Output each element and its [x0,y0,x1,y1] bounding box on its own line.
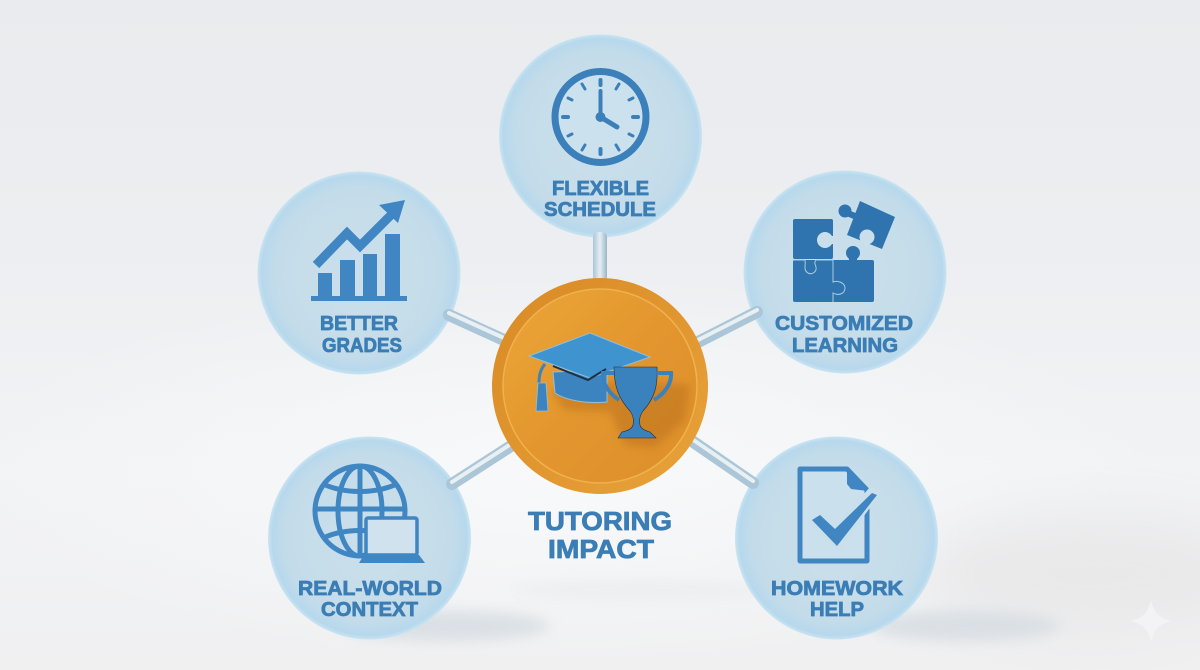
icon: puzzle pieces [793,201,895,302]
panel: flexible schedule [499,34,702,238]
label: BETTER [320,313,399,335]
label: SCHEDULE [544,199,656,221]
panel: better grades [258,172,460,374]
bubble [499,34,702,238]
label [298,578,442,621]
panel: central coin [492,278,708,494]
label: HELP [810,599,864,621]
panel: customized learning [744,170,946,374]
connector: lower left [452,442,514,484]
connector: lower right [692,439,753,483]
label: HOMEWORK [771,578,904,600]
label: GRADES [322,335,402,357]
bubble [735,436,938,640]
bubble [268,436,471,640]
background glow [0,275,1160,665]
floor shadows [340,580,1060,641]
icon: globe and laptop [315,466,425,563]
background shade: lower right [920,515,1200,635]
icon: graduation cap [529,333,650,411]
label: CONTEXT [321,599,418,621]
label: REAL-WORLD [298,578,442,600]
icon: rising bar chart [311,200,407,301]
connectors [449,232,757,484]
panel: homework help [735,436,938,640]
title: TUTORING [528,506,672,536]
label [544,178,656,221]
panel: real-world context [268,436,471,640]
icon: document with check mark [800,469,882,561]
title [528,506,672,564]
label: CUSTOMIZED [775,313,913,335]
title: IMPACT [548,534,654,564]
label [320,313,402,357]
coin face [503,289,697,483]
coin [492,278,708,494]
connector: top [593,232,607,282]
icon: sparkle watermark [1130,600,1172,642]
icon: trophy [603,367,671,438]
label: FLEXIBLE [552,178,649,200]
icon shadow [550,380,690,448]
label [771,578,904,621]
bubble [258,172,460,374]
connector: upper right [698,310,757,342]
connector: upper left [449,313,504,340]
label [775,313,913,357]
icon: clock [555,72,646,162]
bubble [744,170,946,374]
label: LEARNING [792,335,898,357]
